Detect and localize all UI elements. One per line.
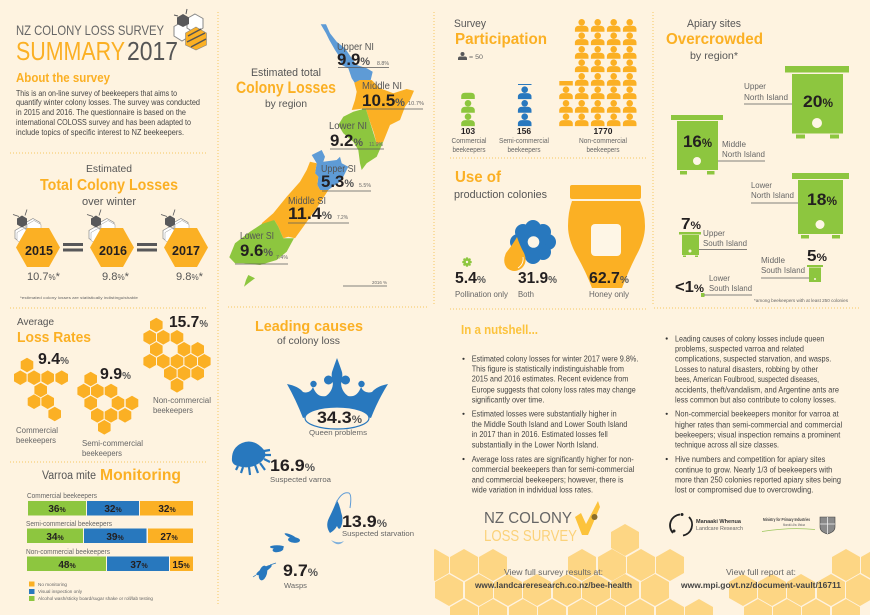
people: commercial: 103 xyxy=(461,126,475,136)
bar: non-commercial: Non-commercial beekeepers xyxy=(26,549,110,556)
right column bullets: higher rates than semi-commercial and commercial xyxy=(675,419,842,429)
region: upper NI xyxy=(337,41,390,69)
panel: loss rates xyxy=(14,314,211,458)
right column bullets: Leading causes of colony losses include queen xyxy=(675,333,824,343)
hexes: commercial: 9.4% xyxy=(38,351,69,368)
icon: wasps xyxy=(253,532,300,581)
region: middle NI xyxy=(362,80,424,110)
text block: about the survey: quantify winter colony losses. The survey was conducted xyxy=(16,97,200,107)
heading: of colony loss xyxy=(277,335,340,347)
link: survey results xyxy=(474,567,632,590)
region: upper SI: 5.5% xyxy=(359,183,372,189)
bar: commercial xyxy=(27,493,193,516)
right column bullets: complications, suspected starvation, and wasps. xyxy=(675,354,831,364)
heading xyxy=(40,163,178,208)
bar: semi-commercial: 27% xyxy=(160,532,178,543)
bar: semi-commercial: 34% xyxy=(46,532,64,543)
hive: upper North Island: Upper xyxy=(744,82,766,91)
panel: colony losses by region xyxy=(229,24,424,287)
region: upper NI: 8.8% xyxy=(377,61,390,67)
region: lower SI xyxy=(235,230,289,264)
title: NZ COLONY LOSS SURVEY xyxy=(16,22,165,38)
stat: both: 31.9% xyxy=(518,270,557,287)
legend: Visual inspection only xyxy=(38,589,83,594)
panel: in a nutshell xyxy=(461,322,842,495)
region: upper SI: 5.3% xyxy=(321,172,354,191)
left column bullets: in 2017 than in 2016. Estimated losses fell xyxy=(472,429,608,439)
region: lower SI: Lower SI xyxy=(240,230,274,242)
hive: upper South Island: South Island xyxy=(703,239,747,248)
heading: over winter xyxy=(82,196,136,208)
hex 2015: 10.7%* xyxy=(27,271,61,283)
hive: middle South Island: South Island xyxy=(761,266,805,275)
bar: non-commercial: 37% xyxy=(130,560,148,571)
legend: No monitoring xyxy=(38,582,68,587)
hive: lower North Island: North Island xyxy=(751,191,794,200)
title: 2017 xyxy=(127,36,178,66)
footnote: *estimated colony losses are statistically indistinguishable xyxy=(20,295,139,300)
hive: middle South Island xyxy=(761,248,827,282)
bar: commercial: 32% xyxy=(158,504,176,515)
link: survey results: View full survey results at: xyxy=(504,567,603,577)
people: semi-commercial: 156 xyxy=(517,126,531,136)
bar: semi-commercial: 39% xyxy=(106,532,124,543)
stat: suspected starvation: Suspected starvation xyxy=(342,529,414,538)
right column bullets: continue to grow. Nearly 1/3 of beekeepers with xyxy=(675,464,832,474)
right column bullets: Losses to natural disasters, robbing by other xyxy=(675,364,818,374)
left column bullets: Estimated colony losses for winter 2017 were 9.8%. xyxy=(472,354,638,364)
hive: middle South Island: Middle xyxy=(761,256,786,265)
heading: Apiary sites xyxy=(687,18,741,30)
right column bullets: technique across all size classes. xyxy=(675,440,779,450)
stat: wasps: 9.7% xyxy=(283,561,318,580)
right column bullets: Non-commercial beekeepers monitor for varroa at xyxy=(675,409,839,419)
heading: Estimated total xyxy=(251,67,321,79)
link: full report xyxy=(680,567,841,590)
hexes: semi-commercial: beekeepers xyxy=(82,449,122,458)
panel: leading causes xyxy=(232,319,414,590)
hex 2016 xyxy=(87,210,134,283)
heading: Loss Rates xyxy=(17,330,91,346)
people: commercial: beekeepers xyxy=(452,147,486,154)
heading xyxy=(42,467,181,484)
stat: suspected varroa xyxy=(270,456,332,484)
region: middle NI: 10.7% xyxy=(408,101,424,107)
hive: lower South Island: South Island xyxy=(709,284,752,293)
hive: lower South Island xyxy=(675,274,752,297)
legend xyxy=(29,582,154,601)
logo: Manaaki Whenua: Landcare Research xyxy=(696,526,743,532)
right column bullets: Hive numbers and competition for apiary sites xyxy=(675,454,825,464)
stat: pollination only xyxy=(455,257,508,299)
region: upper SI: Upper SI xyxy=(321,163,356,175)
left column bullets: wide variation in individual loss rates. xyxy=(471,484,593,494)
icon: title honeycomb with bee xyxy=(174,9,206,50)
hive: upper North Island: 20% xyxy=(803,92,833,111)
heading: Leading causes xyxy=(255,319,363,335)
hexes: non-commercial xyxy=(143,314,211,415)
hive: lower North Island: Lower xyxy=(751,181,772,190)
logo: Manaaki Whenua xyxy=(670,513,743,536)
hexes: non-commercial: Non-commercial xyxy=(153,396,211,405)
stat: honey only: Honey only xyxy=(589,290,629,299)
icon: flower and honey drop xyxy=(504,220,556,271)
hex 2015 xyxy=(13,210,61,283)
hive: middle South Island: 5% xyxy=(807,248,827,265)
scale key xyxy=(458,52,483,61)
text block: about the survey xyxy=(16,88,200,137)
left column bullets: Estimated losses were substantially higher in xyxy=(472,409,617,419)
hex 2017 xyxy=(161,210,208,283)
logo: NZ Colony Loss Survey: NZ COLONY xyxy=(484,510,572,527)
right column bullets: lost or compromised due to overcrowding. xyxy=(675,485,813,495)
hex 2017: 2017 xyxy=(172,244,200,258)
icon: dead bee xyxy=(327,493,351,544)
title: SUMMARY xyxy=(16,36,125,66)
heading: Total Colony Losses xyxy=(40,177,178,194)
legend: Alcohol wash/sticky board/sugar shake or roll/lab testing xyxy=(38,596,154,601)
stat: both: Both xyxy=(518,290,534,299)
link: survey results: www.landcareresearch.co.nz/bee-health xyxy=(474,580,632,590)
hexes: commercial: beekeepers xyxy=(16,436,56,445)
right column bullets: problems, suspected varroa and related xyxy=(675,344,804,354)
text block: about the survey: This is an on-line survey of beekeepers that aims to xyxy=(16,88,177,98)
equals sign xyxy=(137,243,157,252)
hexes: non-commercial: beekeepers xyxy=(153,406,193,415)
region: middle SI: Middle SI xyxy=(288,195,326,207)
hex 2016: 2016 xyxy=(99,244,127,258)
hexes: semi-commercial: 9.9% xyxy=(100,366,131,383)
hive: middle North Island: North Island xyxy=(722,150,765,159)
region: middle SI xyxy=(288,195,349,223)
hive: middle North Island: 16% xyxy=(683,132,712,151)
region: lower NI: 9.2% xyxy=(330,131,363,150)
icon: honey jar xyxy=(568,185,645,288)
left column bullets: the Middle South Island and Lower South Island xyxy=(472,419,628,429)
hexes: commercial xyxy=(14,351,69,445)
heading: by region xyxy=(265,98,307,110)
region: lower SI: 9.6% xyxy=(240,241,273,260)
people: non-commercial: beekeepers xyxy=(586,147,620,154)
stat: wasps xyxy=(283,561,318,590)
region: lower NI xyxy=(329,120,384,150)
stat: queen problems xyxy=(309,408,367,437)
panel: survey participation xyxy=(452,18,636,154)
stat: wasps: Wasps xyxy=(284,581,307,590)
bar: semi-commercial: Semi-commercial beekeepers xyxy=(26,521,112,528)
bar: commercial: 36% xyxy=(48,504,66,515)
left column bullets: 2015 and 2016 estimates. Recent evidence from xyxy=(472,374,628,384)
stat: suspected starvation xyxy=(342,512,414,538)
hive: upper North Island xyxy=(744,66,849,138)
hex 2015: 2015 xyxy=(25,244,53,258)
heading: by region* xyxy=(690,50,738,62)
left column bullets: Average loss rates are significantly higher for non- xyxy=(472,454,634,464)
logo: Ministry for Primary Industries xyxy=(762,517,835,534)
right column bullets: more than 250 colonies reported apiary sites being xyxy=(675,474,841,484)
panel: use of production colonies xyxy=(454,169,645,299)
region: upper NI: 9.9% xyxy=(337,50,370,69)
people: non-commercial xyxy=(559,19,636,154)
bar: non-commercial: 48% xyxy=(58,560,76,571)
right column bullets: beekeepers; visual inspection remains a prominent xyxy=(675,429,841,439)
region: lower NI: Lower NI xyxy=(329,120,367,132)
heading: In a nutshell... xyxy=(461,322,538,337)
left column bullets: This figure is statistically indistinguishable from xyxy=(472,364,624,374)
hive: upper South Island xyxy=(679,216,747,257)
hive: upper North Island: North Island xyxy=(744,93,788,102)
stat: suspected varroa: Suspected varroa xyxy=(270,475,332,484)
stat: suspected varroa: 16.9% xyxy=(270,456,315,475)
logo: Ministry for Primary Industries: Ministry for Primary Industries xyxy=(763,517,810,522)
hive: upper South Island: Upper xyxy=(703,229,725,238)
right column bullets xyxy=(666,333,842,495)
hex 2017: 9.8%* xyxy=(176,271,204,283)
heading: Participation xyxy=(455,31,547,48)
link: full report: View full report at: xyxy=(726,567,796,577)
people: commercial: Commercial xyxy=(452,138,487,145)
heading: Use of xyxy=(455,169,502,186)
heading: Monitoring xyxy=(100,467,181,484)
hive: lower South Island: <1% xyxy=(675,279,704,296)
region: lower SI: 7.4% xyxy=(276,255,289,261)
region: lower NI: 11.9% xyxy=(369,142,383,148)
region: upper SI xyxy=(321,163,372,191)
hexes: non-commercial: 15.7% xyxy=(169,314,208,331)
left column bullets: commercial beekeepers than for semi-commercial xyxy=(472,464,634,474)
heading xyxy=(666,18,763,62)
stat: honey only: 62.7% xyxy=(589,270,629,287)
bar: non-commercial xyxy=(26,549,193,571)
heading: Average xyxy=(17,316,54,328)
link: full report: www.mpi.govt.nz/document-vault/16711 xyxy=(680,580,841,590)
hive: lower South Island: Lower xyxy=(709,274,730,283)
stat: suspected starvation: 13.9% xyxy=(342,512,387,531)
left column bullets: and commercial beekeepers; however, there is xyxy=(472,474,623,484)
panel: apiary sites overcrowded xyxy=(666,18,849,303)
map key xyxy=(343,280,387,286)
heading xyxy=(17,316,91,346)
bar: commercial: Commercial beekeepers xyxy=(27,493,97,500)
region: upper NI: Upper NI xyxy=(337,41,374,53)
hive: middle North Island: Middle xyxy=(722,140,747,149)
bar: non-commercial: 15% xyxy=(172,560,190,571)
hive: lower North Island xyxy=(751,173,849,238)
region: middle SI: 11.4% xyxy=(288,204,332,223)
stat: both xyxy=(518,270,557,299)
heading: Overcrowded xyxy=(666,31,763,48)
hexes: commercial: Commercial xyxy=(16,426,58,435)
stat: pollination only: Pollination only xyxy=(455,290,508,299)
text block: about the survey: in 2015 and 2016. The questionnaire is based on the xyxy=(16,107,186,117)
logo: Manaaki Whenua: Manaaki Whenua xyxy=(696,519,742,525)
icon: varroa mite xyxy=(232,442,271,475)
heading xyxy=(454,169,547,201)
hexes: semi-commercial: Semi-commercial xyxy=(82,439,143,448)
stat: queen problems: Queen problems xyxy=(309,428,367,437)
heading xyxy=(454,18,547,48)
region: middle SI: 7.2% xyxy=(337,215,349,221)
title xyxy=(16,22,178,66)
bar: semi-commercial xyxy=(26,521,193,543)
heading: Survey xyxy=(454,18,486,30)
scale key: = 50 xyxy=(469,54,483,61)
heading xyxy=(255,319,363,347)
text block: about the survey: include topics of specific interest to NZ beekeepers. xyxy=(16,127,184,137)
heading: Estimated xyxy=(86,163,132,175)
people: non-commercial: 1770 xyxy=(594,126,613,136)
map key: 2016 % xyxy=(372,280,387,285)
people: semi-commercial xyxy=(499,84,549,154)
footnote: *among beekeepers with at least 250 colonies xyxy=(754,298,849,303)
heading xyxy=(236,67,336,110)
right column bullets: accidents, theft/vandalism, and Argentine ants are xyxy=(675,384,839,394)
people: commercial xyxy=(452,93,487,154)
panel: total colony losses xyxy=(13,163,208,300)
people: semi-commercial: Semi-commercial xyxy=(499,138,549,145)
hexes: semi-commercial xyxy=(77,366,143,458)
left column bullets: Europe suggests that colony loss rates may change xyxy=(472,384,636,394)
people: non-commercial: Non-commercial xyxy=(579,138,627,145)
stat: honey only xyxy=(589,270,629,299)
people: semi-commercial: beekeepers xyxy=(508,147,541,154)
logo: NZ Colony Loss Survey xyxy=(484,501,600,545)
hive: upper South Island: 7% xyxy=(681,216,701,233)
honeycomb footer background xyxy=(421,524,870,615)
region: middle NI: 10.5% xyxy=(362,91,405,110)
region: middle NI: Middle NI xyxy=(362,80,402,92)
hive: middle North Island xyxy=(671,115,765,174)
heading: Varroa mite xyxy=(42,470,96,482)
stat: pollination only: 5.4% xyxy=(455,270,486,287)
heading: Colony Losses xyxy=(236,79,336,97)
stat: queen problems: 34.3% xyxy=(317,408,362,427)
text block: about the survey: international COLOSS survey and has been adapted to xyxy=(16,117,191,127)
left column bullets xyxy=(462,354,638,494)
left column bullets: substantially in the Lower North Island. xyxy=(472,439,598,449)
right column bullets: bees, American Foulbrood, suspected diseases, xyxy=(675,374,819,384)
panel: varroa mite monitoring xyxy=(26,467,193,601)
logo: Ministry for Primary Industries: Manatū Ahu Matua xyxy=(783,523,805,527)
logo: NZ Colony Loss Survey: LOSS SURVEY xyxy=(484,528,577,545)
left column bullets: significantly over time. xyxy=(472,394,544,404)
map of New Zealand xyxy=(229,24,414,287)
hex 2016: 9.8%* xyxy=(102,271,130,283)
bar: commercial: 32% xyxy=(104,504,122,515)
right column bullets: less common but also contribute to colony losses. xyxy=(675,395,836,405)
icon: crown xyxy=(287,358,388,429)
heading: production colonies xyxy=(454,189,547,201)
heading: about the survey: About the survey xyxy=(16,71,110,85)
hive: lower North Island: 18% xyxy=(807,190,837,209)
equals sign xyxy=(63,243,83,252)
